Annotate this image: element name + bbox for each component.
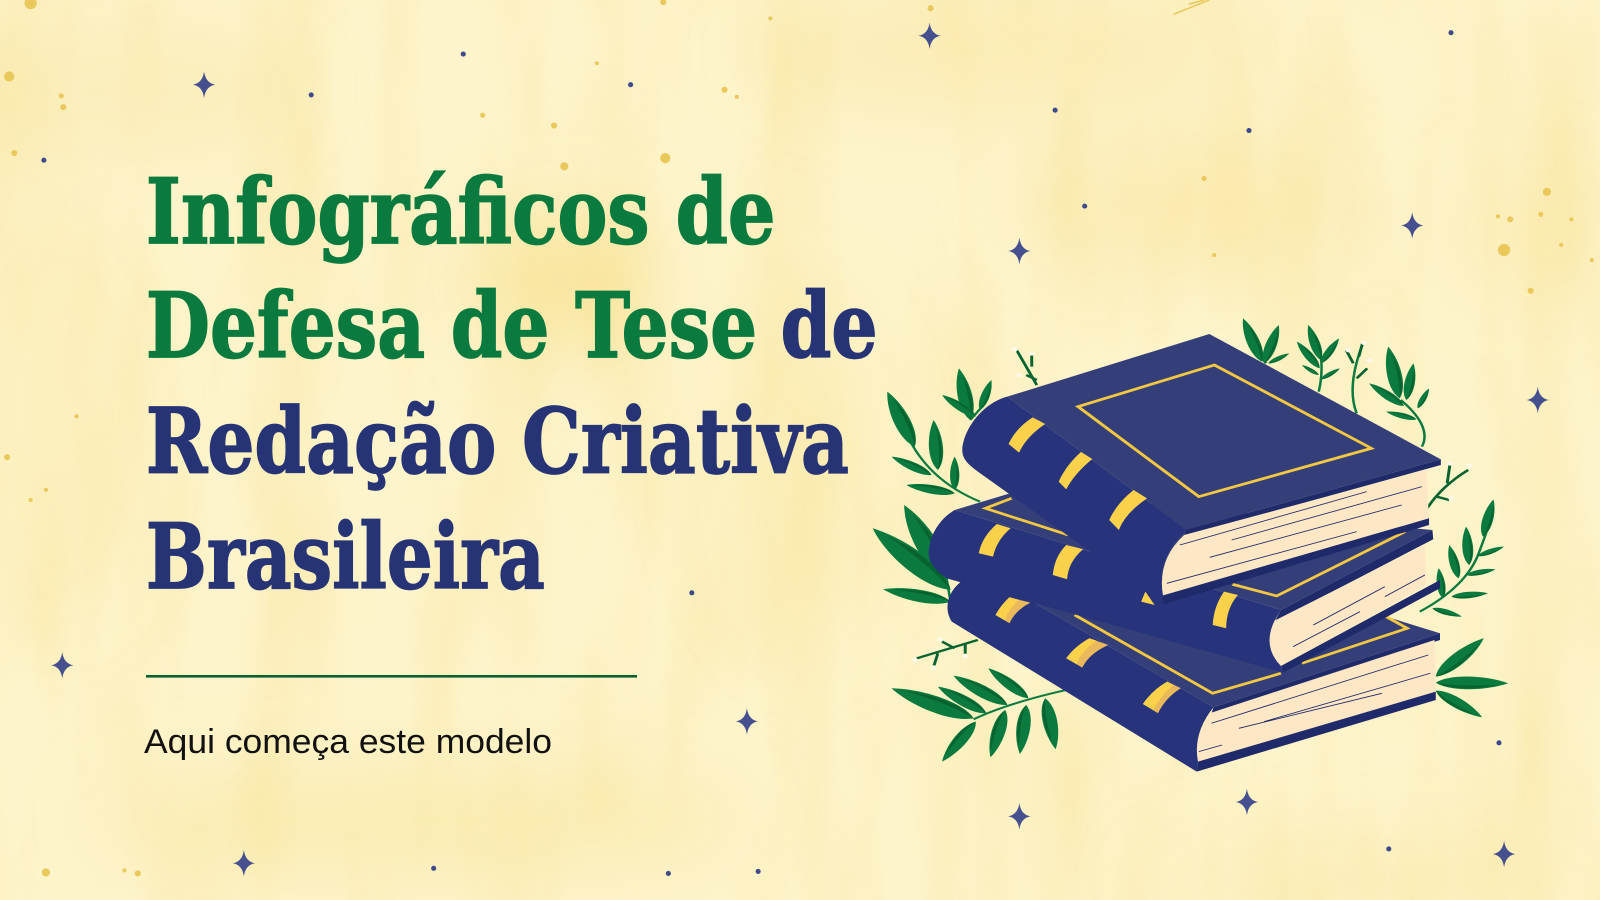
divider line (146, 675, 637, 678)
title: de (781, 274, 878, 379)
title: Infográficos de (146, 160, 776, 265)
title: Defesa de Tese (146, 274, 757, 379)
subtitle: Aqui começa este modelo (144, 723, 552, 761)
title (146, 160, 878, 610)
bottom book (947, 582, 1440, 772)
title: Brasileira (146, 505, 545, 610)
foliage behind books (864, 317, 1508, 765)
middle book (929, 492, 1440, 673)
title: Redação Criativa (146, 389, 849, 494)
illustration: stack of books with leaves (864, 317, 1508, 772)
top book (962, 334, 1441, 604)
